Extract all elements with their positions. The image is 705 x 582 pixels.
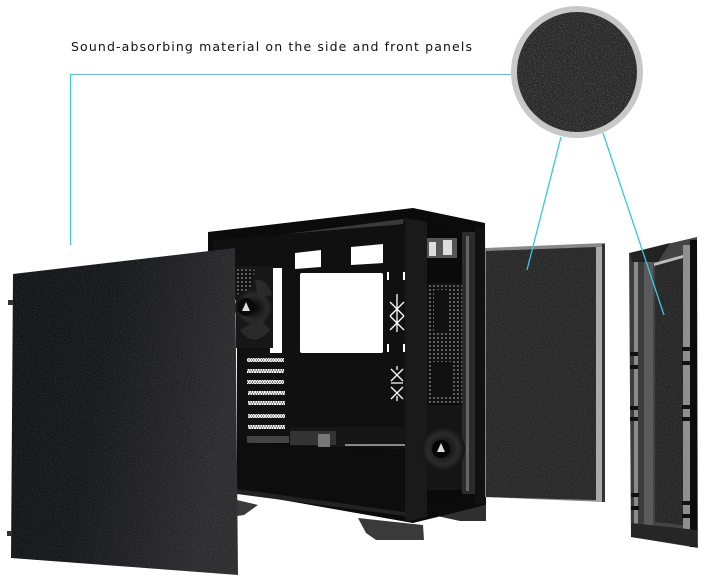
PSU shroud	[237, 442, 405, 512]
front mesh	[427, 283, 462, 403]
clips	[630, 347, 690, 518]
front panel with foam, inside view	[485, 243, 605, 502]
top bracket	[630, 243, 670, 262]
case top highlight	[270, 219, 404, 238]
front fan rail brackets	[427, 238, 457, 258]
material close-up circle	[511, 6, 643, 138]
cyan callout line to front panel	[527, 137, 561, 270]
top panel, narrow view	[629, 237, 698, 548]
rear X-shaped tie-down cutouts	[390, 294, 404, 401]
bottom cap	[631, 523, 697, 547]
front fan	[421, 405, 465, 490]
rail left	[630, 250, 652, 533]
front glass edge	[462, 232, 475, 494]
rear panel interior	[213, 224, 405, 450]
rail right	[683, 245, 690, 537]
sound-dampened side panel	[7, 248, 238, 575]
rear fan	[235, 266, 273, 348]
PCI expansion slots	[247, 358, 285, 429]
heading text: Sound-absorbing material on the side and front panels	[71, 39, 472, 54]
front right edge	[475, 226, 485, 504]
cyan callout line to top panel	[603, 133, 664, 315]
front interior	[427, 227, 475, 503]
cyan callout line to heading and side panel	[70, 74, 512, 245]
foam strip	[655, 258, 683, 525]
panel thumbscrews	[8, 300, 13, 305]
top cross-bar	[654, 255, 683, 266]
case frame	[208, 208, 486, 523]
inner wall	[644, 262, 653, 530]
rear panel cutouts	[270, 244, 405, 353]
bottom fan and drive area	[247, 427, 405, 447]
front pillar	[405, 218, 427, 522]
PC case body	[208, 208, 486, 540]
case feet	[237, 500, 486, 540]
